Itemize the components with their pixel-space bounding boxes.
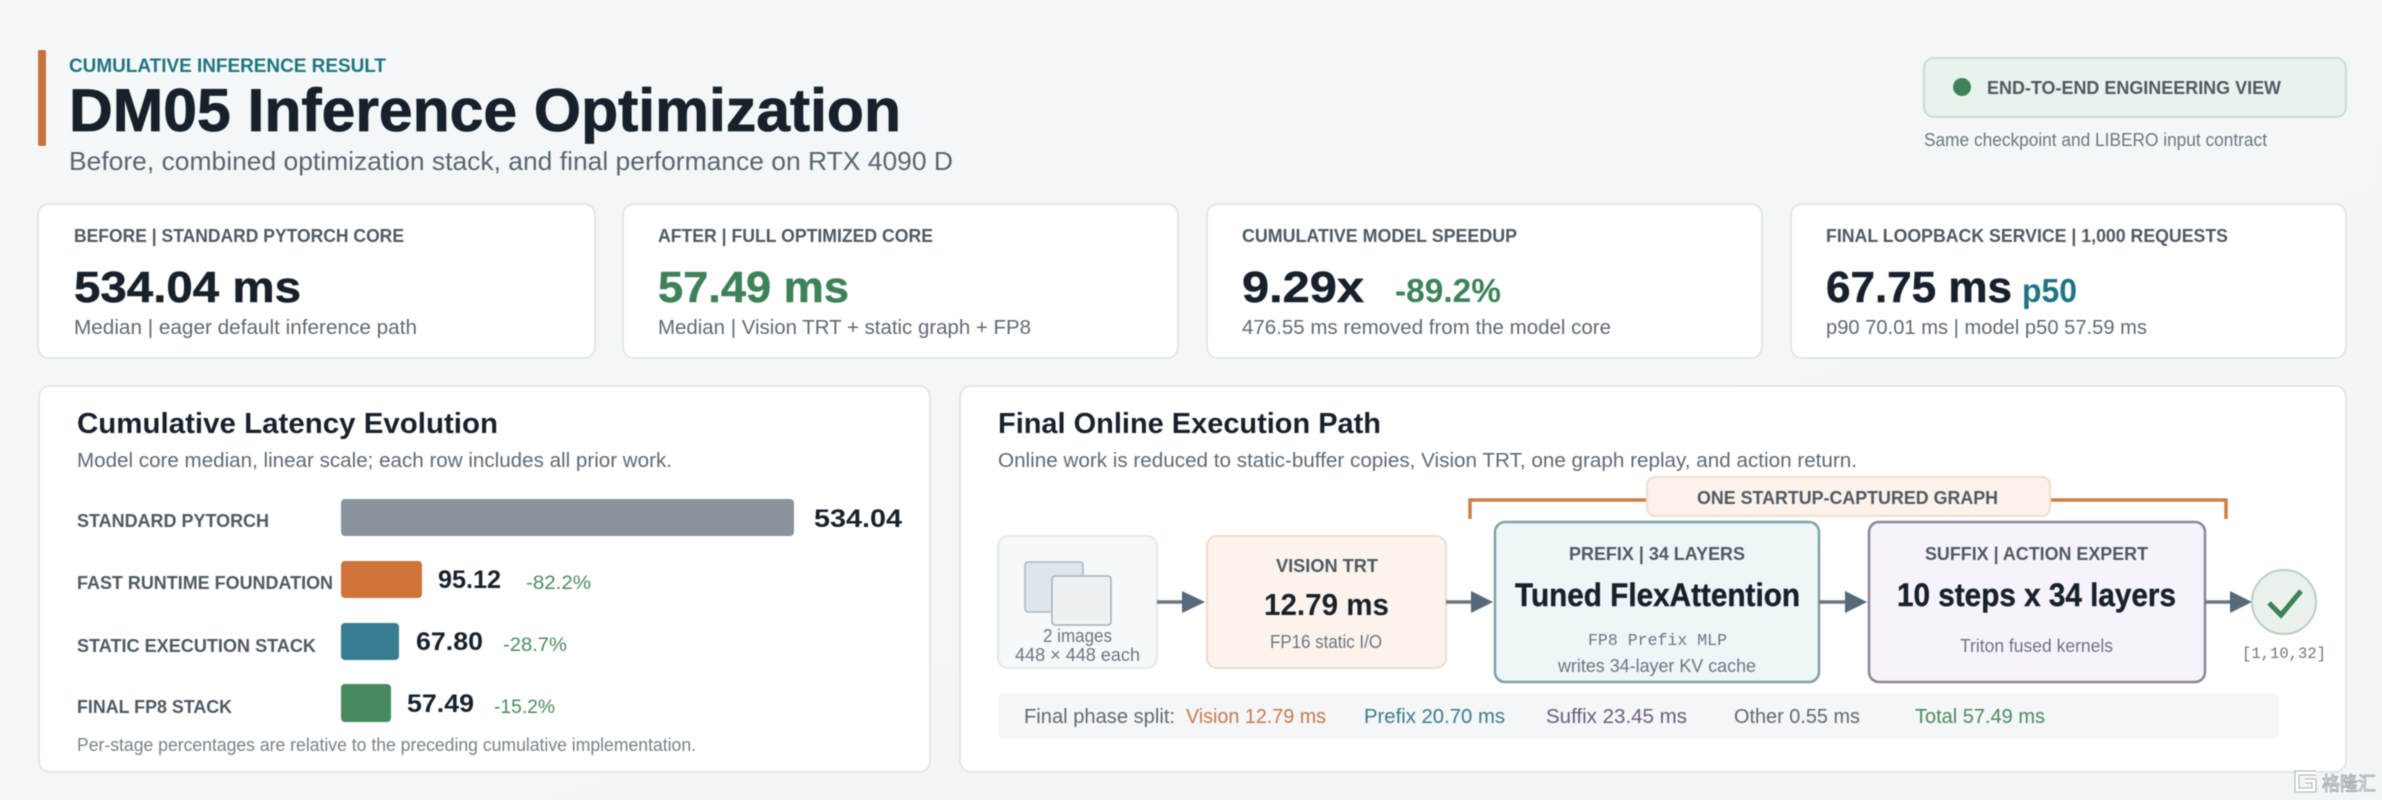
card label: BEFORE | STANDARD PYTORCH CORE (74, 225, 404, 246)
subtitle: Before, combined optimization stack, and final performance on RTX 4090 D (69, 146, 953, 176)
card value: 9.29x (1242, 263, 1365, 312)
panel: cumulative latency evolution (39, 386, 930, 772)
p50 tag: p50 (2022, 272, 2077, 309)
block: vision trt: VISION TRT (1276, 555, 1379, 576)
row: standard pytorch: 534.04 (814, 505, 902, 533)
row: final fp8 stack: 57.49 (407, 690, 474, 718)
block: suffix: SUFFIX | ACTION EXPERT (1925, 543, 2149, 564)
row: static execution stack: STATIC EXECUTION STACK (77, 635, 317, 656)
block: vision trt (1207, 536, 1446, 668)
input caption: 2 images (1043, 626, 1112, 646)
eyebrow: CUMULATIVE INFERENCE RESULT (69, 56, 386, 77)
panel: loopback card (1791, 204, 2346, 358)
card label: AFTER | FULL OPTIMIZED CORE (658, 225, 933, 246)
card note: 476.55 ms removed from the model core (1242, 317, 1611, 339)
panel: before card (38, 204, 595, 358)
heading: Cumulative Latency Evolution (77, 408, 498, 440)
output shape: [1,10,32] (2242, 645, 2326, 663)
panel: final online execution path (960, 386, 2346, 772)
footnote: Per-stage percentages are relative to the preceding cumulative implementation. (77, 735, 696, 755)
watermark (2297, 769, 2376, 796)
phase split strip: Prefix 20.70 ms (1364, 706, 1505, 728)
card label: FINAL LOOPBACK SERVICE | 1,000 REQUESTS (1826, 225, 2228, 246)
icon: status dot (1953, 78, 1971, 96)
input block: 2 images: 448 × 448 each (1015, 645, 1140, 665)
block: prefix: FP8 Prefix MLP (1588, 632, 1727, 651)
panel: speedup card (1207, 204, 1762, 358)
accent bar (38, 50, 46, 146)
phase split strip: Final phase split: (1024, 706, 1175, 728)
card note: Median | eager default inference path (74, 317, 417, 339)
badge note: Same checkpoint and LIBERO input contract (1924, 130, 2267, 150)
block: suffix: Triton fused kernels (1960, 636, 2113, 656)
card note: Median | Vision TRT + static graph + FP8 (658, 317, 1031, 339)
row: static execution stack: -28.7% (503, 635, 567, 656)
phase split strip: Suffix 23.45 ms (1546, 706, 1687, 728)
card value: 57.49 ms (658, 263, 849, 312)
block: prefix (1495, 522, 1819, 682)
row: final fp8 stack: -15.2% (494, 697, 555, 718)
block: prefix: writes 34-layer KV cache (1557, 656, 1756, 676)
block: prefix: PREFIX | 34 LAYERS (1569, 543, 1745, 564)
title: DM05 Inference Optimization (69, 77, 901, 144)
tag: one startup-captured graph: ONE STARTUP-CAPTURED GRAPH (1697, 487, 1998, 508)
arrow: input to vision (1157, 591, 1205, 613)
description: Model core median, linear scale; each row includes all prior work. (77, 450, 672, 472)
bar chart (77, 499, 902, 722)
heading: Final Online Execution Path (998, 408, 1381, 440)
description: Online work is reduced to static-buffer copies, Vision TRT, one graph replay, and action return. (998, 450, 1857, 472)
icon: output check (2252, 570, 2316, 634)
row: fast runtime foundation: FAST RUNTIME FOUNDATION (77, 572, 333, 593)
block: vision trt: 12.79 ms (1264, 587, 1389, 622)
card value: 67.75 ms (1826, 263, 2012, 312)
card value: 534.04 ms (74, 263, 301, 312)
arrow: vision to prefix (1446, 591, 1493, 613)
row: static execution stack: 67.80 (416, 628, 483, 656)
watermark: 格隆汇 (2322, 769, 2376, 796)
tag: one startup-captured graph (1647, 477, 2050, 516)
row: static execution stack (77, 623, 567, 660)
block: suffix: 10 steps x 34 layers (1897, 577, 2176, 613)
row: final fp8 stack (77, 684, 555, 722)
badge text: END-TO-END ENGINEERING VIEW (1987, 77, 2282, 98)
phase split strip: Other 0.55 ms (1734, 706, 1860, 728)
phase split strip: Total 57.49 ms (1915, 706, 2045, 728)
phase split strip (998, 693, 2279, 739)
block: vision trt: FP16 static I/O (1270, 632, 1382, 652)
row: fast runtime foundation (77, 561, 591, 598)
row: final fp8 stack: FINAL FP8 STACK (77, 696, 233, 717)
percent reduction: -89.2% (1395, 272, 1501, 309)
icon: stacked images (1025, 562, 1111, 625)
block: prefix: Tuned FlexAttention (1515, 577, 1800, 613)
row: standard pytorch (77, 499, 902, 536)
phase split strip: Vision 12.79 ms (1186, 706, 1326, 728)
row: standard pytorch: STANDARD PYTORCH (77, 510, 269, 531)
card note: p90 70.01 ms | model p50 57.59 ms (1826, 317, 2147, 339)
card label: CUMULATIVE MODEL SPEEDUP (1242, 225, 1517, 246)
panel: after card (623, 204, 1178, 358)
input block: 2 images (998, 536, 1157, 668)
header block (38, 50, 953, 176)
row: fast runtime foundation: 95.12 (438, 566, 501, 594)
row: fast runtime foundation: -82.2% (526, 573, 591, 594)
arrow: prefix to suffix (1819, 591, 1867, 613)
block: suffix (1869, 522, 2205, 682)
badge: end-to-end view (1924, 58, 2346, 117)
arrow: suffix to output (2205, 591, 2252, 613)
bracket: one graph (1470, 500, 2226, 519)
